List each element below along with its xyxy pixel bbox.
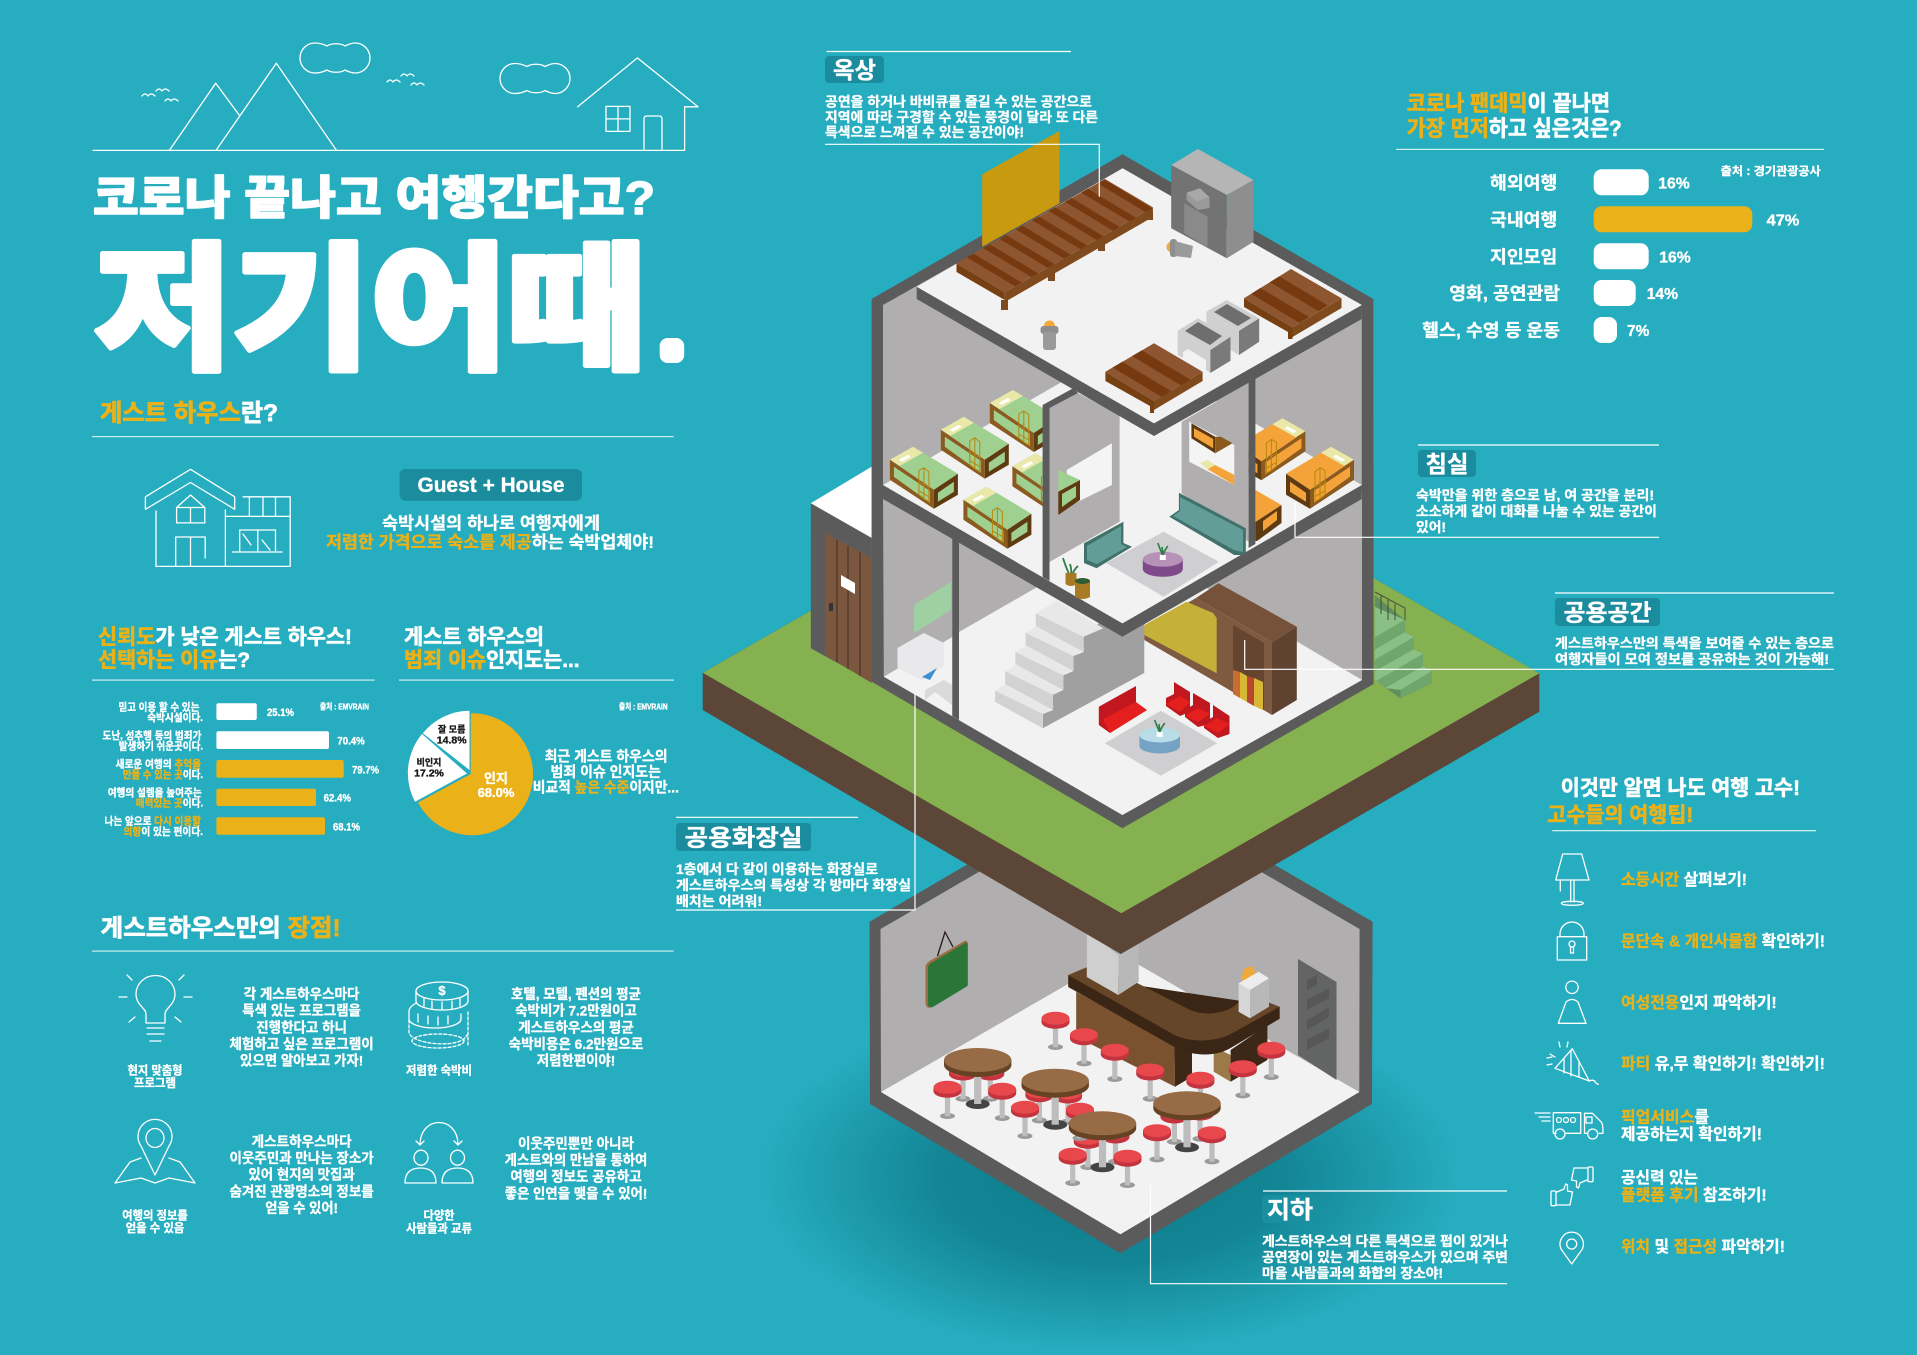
tip: reviews: 플랫폼 후기 참조하기! (1621, 1186, 1767, 1204)
heading (1547, 777, 1800, 827)
text: price: 저렴한편이야! (537, 1053, 615, 1069)
text: local info: 이웃주민과 만나는 장소가 (229, 1150, 374, 1166)
text (676, 862, 911, 909)
heading: 선택하는 이유는? (98, 649, 250, 672)
text (1416, 488, 1657, 535)
bar chart: 16% (1658, 176, 1690, 192)
short pallet right (1244, 269, 1342, 339)
text: 게스트하우스의 다른 특색으로 펍이 있거나 (1262, 1234, 1509, 1249)
text: 배치는 어려워! (676, 894, 762, 909)
ground floor walls (883, 490, 1362, 815)
title (93, 172, 680, 388)
bar chart (102, 700, 379, 838)
text: 공연장이 있는 게스트하우스가 있으며 주변 (1262, 1250, 1508, 1265)
illustration: outdoor stairs (1374, 592, 1432, 698)
bar chart: 70.4% (337, 736, 365, 748)
heading (98, 626, 352, 672)
pie chart: 68.0% (478, 785, 515, 800)
rug and table (1105, 711, 1217, 776)
bar chart: 62.4% (324, 793, 351, 805)
source: 출처 : EMVRAIN (619, 702, 668, 712)
icon: coins: $ (438, 983, 446, 998)
label: exchange (406, 1208, 472, 1236)
bar chart: 지인모임 (1490, 247, 1557, 267)
pie chart (408, 711, 533, 835)
bar chart: 25.1% (267, 707, 294, 719)
pie chart: 인지 (484, 771, 508, 786)
label: local program: 현지 맞춤형 (128, 1062, 182, 1078)
bar chart: 나는 앞으로 다시 이용할 (104, 814, 201, 828)
bar chart (1422, 169, 1799, 343)
roof lights (1040, 239, 1193, 350)
text: program: 체험하고 싶은 프로그램이 (229, 1036, 374, 1052)
pie chart: 잘 모름 (438, 724, 465, 734)
tip: pickup (1535, 1108, 1762, 1144)
text (825, 94, 1098, 140)
text: 소소하게 같이 대화를 나눌 수 있는 공간이 (1416, 504, 1657, 519)
text: 공연을 하거나 바비큐를 즐길 수 있는 공간으로 (825, 94, 1092, 110)
heading: 게스트 하우스란? (100, 400, 278, 427)
tip: lights out (1556, 854, 1747, 905)
bar chart: 47% (1767, 212, 1799, 230)
tip: location (1560, 1232, 1785, 1264)
text: price: 숙박비용은 6.2만원으로 (509, 1036, 643, 1052)
illustration: basement cafe (870, 775, 1373, 1253)
bar chart: 의향이 있는 편이다. (124, 825, 203, 838)
main title period: . (664, 301, 680, 368)
text: 게스트하우스만의 특색을 보여줄 수 있는 층으로 (1555, 636, 1834, 651)
illustration: rooftop (917, 131, 1362, 423)
text: program: 특색 있는 프로그램을 (242, 1003, 361, 1019)
text: program: 있으면 알아보고 가자! (240, 1053, 363, 1069)
stairs (995, 601, 1144, 728)
bar chart: 도난, 성추행 등의 범죄가 (102, 729, 202, 742)
rug and purple table (1106, 532, 1219, 597)
heading: 범죄 이슈인지도는... (404, 649, 580, 672)
illustration: annex with door (811, 467, 872, 683)
text: program (229, 986, 374, 1069)
icon: light bulb (119, 975, 192, 1041)
tip: pickup: 제공하는지 확인하기! (1621, 1126, 1762, 1144)
heading (404, 626, 580, 672)
tip: locker (1557, 922, 1825, 960)
tip: locker: 문단속 & 개인사물함 확인하기! (1621, 932, 1825, 950)
text: local info: 숨겨진 관광명소의 정보를 (229, 1183, 374, 1199)
text: people: 이웃주민뿐만 아니라 (518, 1135, 634, 1151)
badge: Guest + House (400, 469, 582, 501)
bar chart: 국내여행 (1490, 210, 1557, 230)
second floor walls and floor (883, 170, 1362, 623)
pie chart: 비인지 (417, 756, 441, 768)
bar chart: 만들 수 있는 곳이다. (123, 768, 203, 781)
label: exchange: 다양한 (424, 1208, 454, 1222)
text: people: 여행의 정보도 공유하고 (510, 1169, 642, 1185)
bathroom (884, 538, 959, 720)
main title: 저기어때 (94, 234, 646, 388)
text: 여행자들이 모여 정보를 공유하는 것이 가능해! (1555, 652, 1829, 667)
text: 지역에 따라 구경할 수 있는 풍경이 달라 또 다른 (825, 110, 1098, 125)
tip: women only (1558, 981, 1777, 1023)
bar chart: 68.1% (333, 821, 360, 833)
panel: travel tips (1535, 777, 1825, 1264)
tip: reviews (1551, 1167, 1767, 1206)
bar chart: 여행의 설렘을 높여주는 (108, 786, 202, 799)
long wooden deck (956, 179, 1153, 310)
bar chart: 발생하기 쉬운곳이다. (119, 740, 203, 752)
central lounge (1050, 383, 1249, 623)
label: exchange: 사람들과 교류 (406, 1220, 472, 1236)
short pallet front (1105, 343, 1203, 413)
yellow screen (982, 131, 1060, 247)
bar chart: 16% (1659, 250, 1691, 266)
text: 1층에서 다 같이 이용하는 화장실로 (676, 862, 878, 877)
heading: 고수들의 여행팁! (1547, 804, 1693, 827)
teal sofas (1084, 522, 1132, 568)
line scenery: mountains, clouds, house (93, 43, 698, 150)
illustration: ground and second floors (872, 154, 1374, 828)
bar chart: 79.7% (352, 764, 379, 776)
bar chart: 7% (1627, 323, 1649, 340)
label: 옥상 (833, 57, 876, 83)
bunk beds: green (890, 390, 1080, 549)
pie chart: 14.8% (437, 734, 467, 746)
text: local info: 있어 현지의 맛집과 (248, 1167, 355, 1183)
red sofa and chairs (1099, 682, 1230, 738)
counter box with bread (1239, 966, 1269, 1018)
description: 저렴한 가격으로 숙소를 제공하는 숙박업체야! (326, 533, 654, 552)
callout: rooftop (825, 52, 1099, 197)
text: program: 진행한다고 하니 (256, 1019, 347, 1035)
bar chart: 믿고 이용 할 수 있는 (118, 700, 200, 714)
panel: crime issue awareness pie chart (399, 626, 679, 835)
description (326, 514, 654, 552)
text: 있어! (1416, 520, 1446, 535)
icon: house (145, 469, 290, 566)
badge: Guest + House: Guest + House (418, 474, 564, 497)
label: travel info: 얻을 수 있음 (126, 1221, 184, 1235)
pie caption: 비교적 높은 수준이지만... (533, 780, 679, 797)
label: travel info: 여행의 정보를 (122, 1208, 188, 1222)
tip: women only: 여성전용인지 파악하기! (1621, 994, 1777, 1012)
label (825, 56, 884, 83)
heading (1407, 91, 1622, 141)
panel: what is a guest house (92, 400, 674, 566)
bar chart: 해외여행 (1490, 173, 1557, 193)
text: price: 호텔, 모텔, 펜션의 평균 (511, 986, 641, 1002)
text (1555, 636, 1834, 667)
pie caption (533, 748, 679, 797)
text: people: 좋은 인연을 맺을 수 있어! (505, 1185, 647, 1201)
panel: post-pandemic wishes bar chart (1396, 91, 1824, 343)
source: 출처 : 경기관광공사 (1721, 164, 1821, 178)
callout: common space (1245, 593, 1834, 669)
tip: location: 위치 및 접근성 파악하기! (1621, 1238, 1785, 1256)
icon: coins (409, 982, 468, 1048)
bookshelf and yellow panel (1144, 583, 1297, 715)
bar chart: 매력있는 곳이다. (136, 796, 203, 810)
heading: 가장 먼저하고 싶은것은? (1407, 116, 1622, 141)
description: 숙박시설의 하나로 여행자에게 (382, 514, 600, 533)
machine unit (1171, 149, 1254, 258)
bar chart: 14% (1647, 286, 1678, 303)
callout: shared bathroom (676, 693, 915, 910)
label: 공용공간 (1564, 600, 1652, 626)
bar chart: 헬스, 수영 등 운동 (1422, 320, 1560, 340)
illustration: ground plate (703, 433, 1539, 954)
bar chart: 숙박시설이다. (147, 711, 203, 724)
tip: lights out: 소등시간 살펴보기! (1621, 871, 1747, 889)
bunk beds: orange (1237, 418, 1354, 541)
heading: 신뢰도가 낮은 게스트 하우스! (98, 626, 352, 649)
partitions (1043, 388, 1078, 581)
label: 공용화장실 (684, 824, 802, 850)
heading: 이것만 알면 나도 여행 고수! (1561, 777, 1800, 800)
text: price: 게스트하우스의 평균 (518, 1019, 634, 1035)
text: price (509, 986, 643, 1069)
text (1262, 1234, 1509, 1281)
text: 특색으로 느껴질 수 있는 공간이야! (825, 125, 1024, 140)
heading: 게스트하우스만의 장점! (101, 915, 341, 942)
text: local info: 게스트하우스마다 (252, 1133, 352, 1149)
text: people (505, 1135, 647, 1201)
bar chart: 영화, 공연관람 (1449, 284, 1560, 304)
plants (1063, 558, 1090, 599)
panel: why choose guest house bar chart (92, 626, 379, 838)
text: 게스트하우스의 특성상 각 방마다 화장실 (676, 878, 911, 893)
icon: chalkboard (926, 932, 968, 1008)
basement shadow (760, 1000, 1460, 1352)
air conditioners (1178, 300, 1259, 373)
pie caption: 최근 게스트 하우스의 (545, 748, 668, 765)
label: local program: 프로그램 (134, 1076, 176, 1090)
text: local info (229, 1133, 374, 1216)
pie chart: 17.2% (414, 767, 445, 779)
pie caption: 범죄 이슈 인지도는 (550, 764, 661, 781)
text: program: 각 게스트하우스마다 (244, 986, 360, 1002)
label: local program (128, 1062, 182, 1090)
label: travel info (122, 1208, 188, 1235)
label: low cost: 저렴한 숙박비 (406, 1062, 472, 1078)
tip: reviews: 공신력 있는 (1621, 1169, 1698, 1187)
callout: bedroom (1295, 445, 1659, 537)
icon: map pin (115, 1119, 195, 1183)
icon: people exchanging (405, 1122, 473, 1183)
subtitle: 코로나 끝나고 여행간다고? (93, 172, 655, 224)
bar chart: 새로운 여행의 추억을 (116, 758, 201, 770)
basement door (1298, 959, 1336, 1080)
slab between floors (883, 485, 1362, 637)
stools and tables (934, 1012, 1285, 1188)
heading: 게스트 하우스의 (404, 626, 544, 649)
label: 침실 (1426, 451, 1468, 477)
tip: pickup: 픽업서비스를 (1621, 1108, 1709, 1126)
text: 마을 사람들과의 화합의 장소야! (1262, 1266, 1443, 1281)
text: local info: 얻을 수 있어! (265, 1200, 338, 1216)
heading: 코로나 팬데믹이 끝나면 (1407, 91, 1610, 116)
text: 숙박만을 위한 층으로 남, 여 공간을 분리! (1416, 488, 1654, 503)
label: 지하 (1267, 1197, 1313, 1224)
text: price: 숙박비가 7.2만원이고 (515, 1003, 637, 1019)
text: people: 게스트와의 만남을 통하여 (505, 1152, 647, 1168)
tip: party: 파티 유,무 확인하기! 확인하기! (1621, 1055, 1825, 1073)
source: 출처 : EMVRAIN (320, 702, 369, 712)
tip: party (1547, 1042, 1825, 1084)
bar counter (1068, 930, 1280, 1087)
roof edge (917, 287, 1362, 436)
callout: basement (1150, 1185, 1509, 1284)
panel: guest house advantages (92, 915, 674, 1236)
